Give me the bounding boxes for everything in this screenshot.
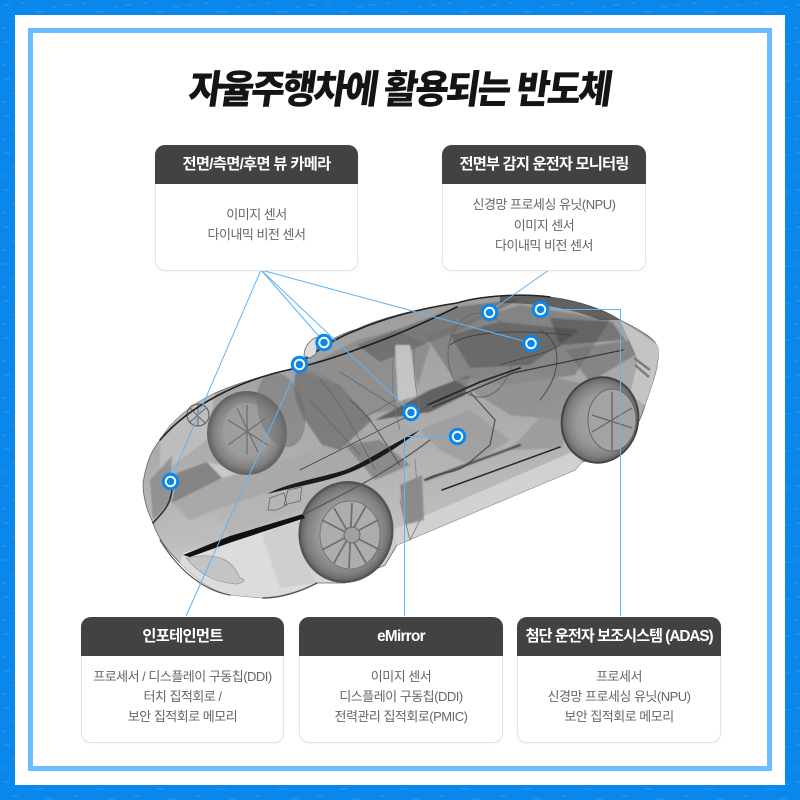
panel: infotainment: 프로세서 / 디스플레이 구동칩(DDI)	[93, 669, 272, 684]
panel: view cameras: 이미지 센서	[226, 207, 287, 222]
panel: eMirror: 이미지 센서	[371, 669, 431, 684]
car illustration	[143, 295, 658, 598]
panel: ADAS: 첨단 운전자 보조시스템 (ADAS)	[525, 628, 713, 645]
panel: infotainment	[81, 617, 284, 743]
cabin interior	[400, 305, 640, 525]
panel: view cameras	[155, 145, 358, 271]
front far headlight detail	[187, 404, 209, 426]
panel: eMirror: eMirror	[377, 628, 425, 645]
panel: infotainment: 보안 집적회로 메모리	[128, 709, 237, 724]
panel: view cameras: 전면/측면/후면 뷰 카메라	[183, 156, 330, 173]
panel: ADAS: 신경망 프로세싱 유닛(NPU)	[548, 689, 690, 704]
rear wheel	[552, 369, 648, 471]
sensor markers	[163, 302, 548, 489]
near front wheel	[289, 472, 403, 592]
panel: infotainment: 인포테인먼트	[142, 628, 223, 645]
panel: infotainment: 터치 집적회로 /	[143, 689, 222, 704]
panel: driver monitoring: 다이내믹 비전 센서	[495, 238, 593, 253]
panel: ADAS: 프로세서	[596, 669, 642, 684]
mirror	[304, 337, 318, 358]
hood plane	[150, 393, 420, 535]
panel: driver monitoring	[442, 145, 646, 271]
panel: eMirror	[299, 617, 503, 743]
lower sill	[392, 452, 582, 545]
panel: ADAS: 보안 집적회로 메모리	[564, 709, 674, 724]
tail	[620, 320, 658, 405]
far front wheel	[208, 392, 286, 474]
title: 자율주행차에 활용되는 반도체	[186, 59, 614, 115]
panel: eMirror: 디스플레이 구동칩(DDI)	[339, 689, 463, 704]
panel: ADAS	[517, 617, 721, 743]
panel: driver monitoring: 전면부 감지 운전자 모니터링	[460, 156, 628, 173]
panel: driver monitoring: 이미지 센서	[514, 218, 574, 232]
panel: view cameras: 다이내믹 비전 센서	[208, 227, 305, 242]
windshield and cabin	[294, 299, 520, 480]
panel: driver monitoring: 신경망 프로세싱 유닛(NPU)	[472, 197, 615, 212]
contour lines	[153, 295, 623, 598]
door handle and air vent	[268, 487, 302, 510]
panel: eMirror: 전력관리 집적회로(PMIC)	[335, 709, 467, 724]
connector lines	[170, 270, 620, 616]
